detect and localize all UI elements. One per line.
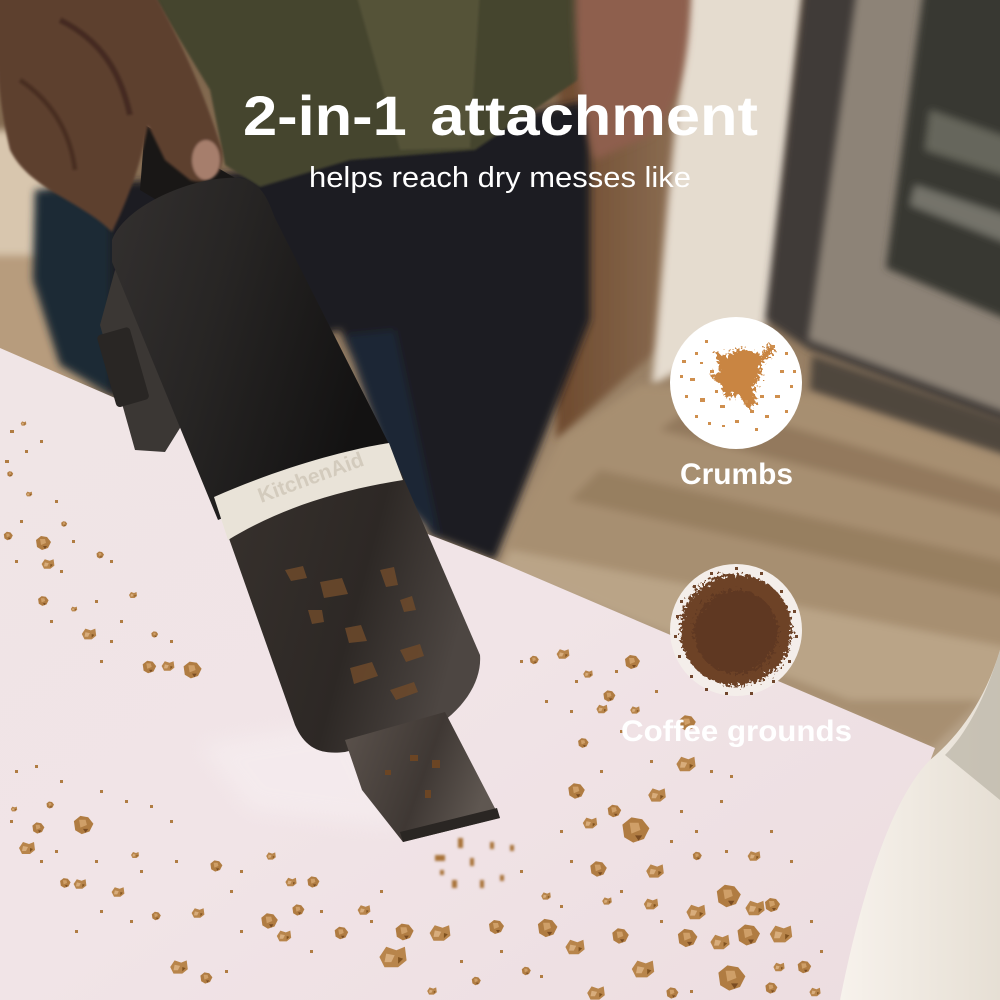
label: coffee grounds: Coffee grounds bbox=[621, 715, 852, 748]
second hand, blurred bbox=[575, 0, 690, 160]
icon: coffee grounds circle bbox=[670, 564, 802, 696]
subtitle: helps reach dry messes like bbox=[309, 162, 691, 194]
vacuum reflection on counter bbox=[200, 720, 400, 830]
vacuum top handle bbox=[140, 125, 235, 205]
person: jeans bbox=[33, 100, 590, 560]
nozzle bbox=[345, 712, 500, 842]
wood floor bbox=[500, 385, 1000, 750]
hand holding the vacuum bbox=[0, 0, 223, 232]
wooden cabinet panel bbox=[556, 0, 695, 440]
person: olive shirt bbox=[150, 0, 585, 187]
collar brand text: KitchenAid bbox=[255, 448, 367, 508]
fridge glass bbox=[886, 0, 1000, 325]
wine fridge steel bbox=[808, 0, 1000, 418]
dark fridge frame bbox=[765, 0, 1000, 430]
counter top bbox=[0, 348, 935, 1000]
white door frame bbox=[652, 0, 805, 385]
debris inside tank bbox=[285, 566, 424, 700]
main motor body bbox=[112, 178, 392, 520]
wall and cabinet left bbox=[0, 130, 110, 385]
flying crumbs under nozzle bbox=[435, 838, 514, 888]
handle / battery block bbox=[100, 270, 185, 452]
milk bottle bbox=[840, 650, 1000, 1000]
icon: crumbs circle bbox=[670, 317, 802, 449]
title: 2-in-1 attachment bbox=[243, 84, 758, 147]
label: crumbs: Crumbs bbox=[680, 458, 793, 491]
clear dust tank bbox=[226, 470, 480, 753]
counter crumbs bbox=[4, 421, 823, 1000]
debris in nozzle bbox=[385, 755, 440, 798]
white collar with brand name bbox=[214, 443, 403, 540]
handheld vacuum bbox=[96, 178, 500, 842]
fridge vent bbox=[810, 355, 1000, 460]
